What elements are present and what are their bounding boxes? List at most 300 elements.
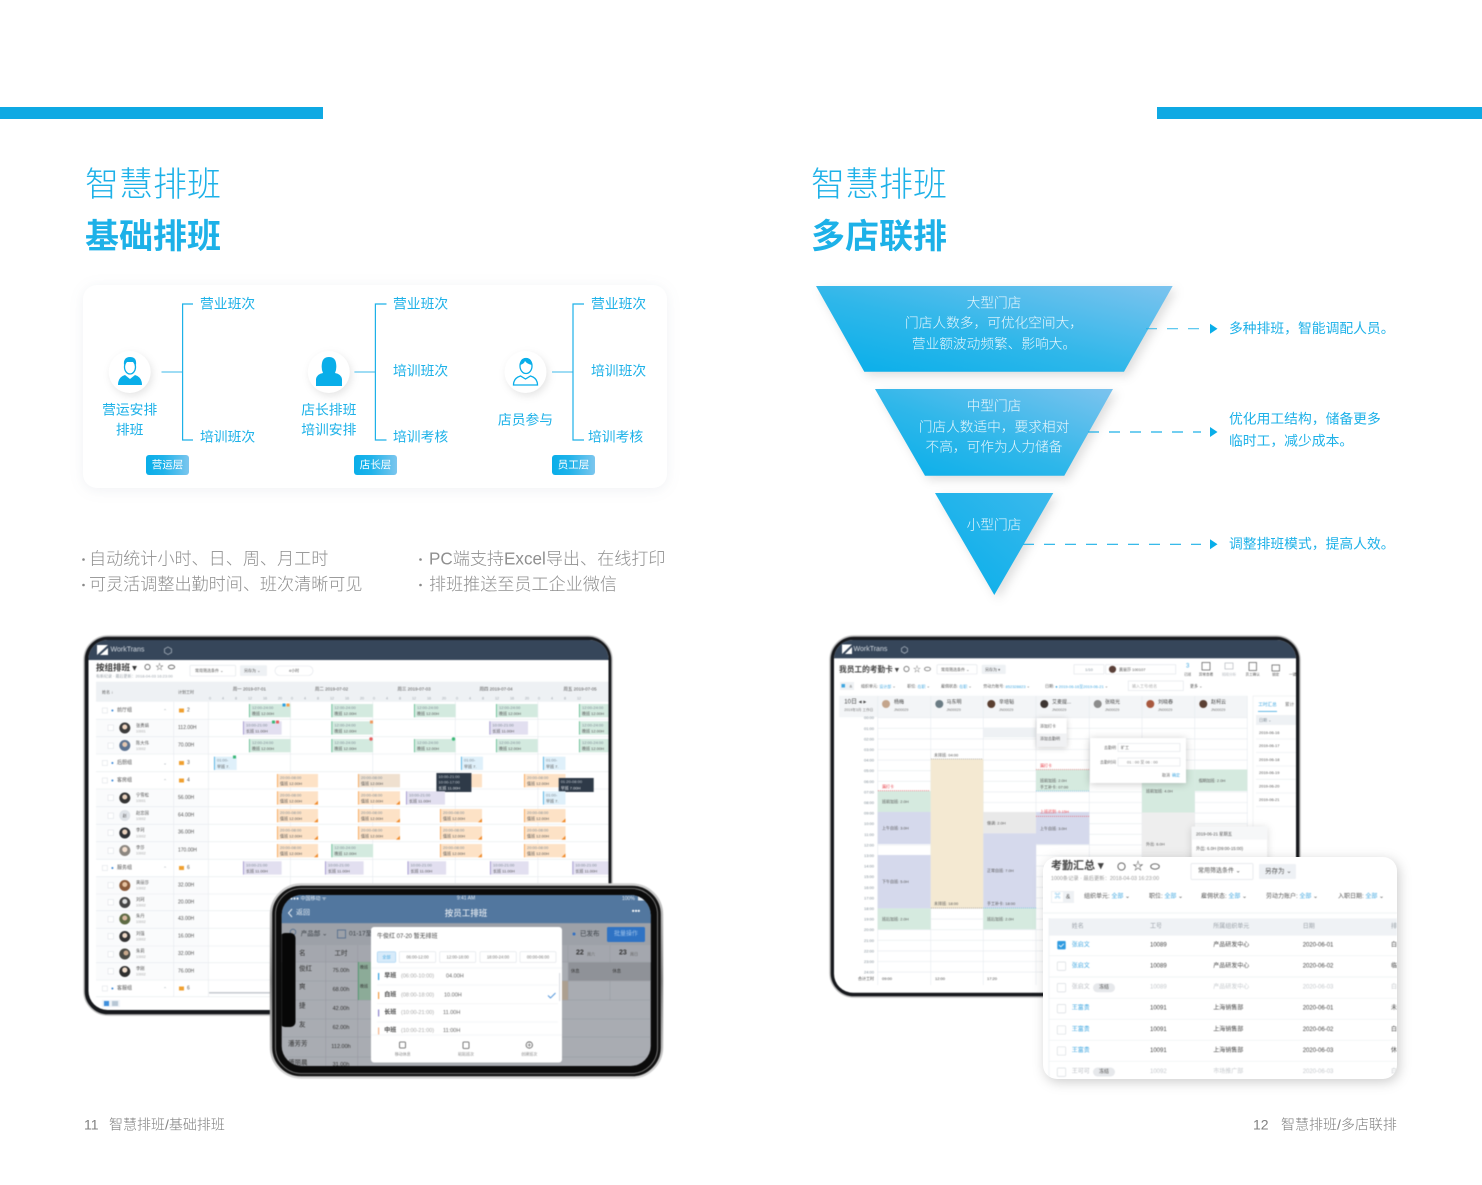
calendar column 3 blocks: 借调: 2.0H xyxy=(987,820,1006,826)
calendar column 4 blocks xyxy=(1036,762,1089,844)
shifts row 3: 12:00-24:00 xyxy=(334,740,357,745)
shifts row 7: 值班 12.00H xyxy=(527,815,549,821)
schedule toolbar: 有新纪录 · 最后更新：2018-04-03 16:23:00 xyxy=(96,672,173,678)
shifts row 6: 值班 12.00H xyxy=(361,797,383,803)
phone filter bar: 01-17至 xyxy=(349,930,373,938)
attendance filters: & xyxy=(850,684,852,688)
right heading xyxy=(811,166,947,256)
calendar grid and hour axis: 17:20 xyxy=(987,976,998,981)
phone header: 返回 xyxy=(296,908,310,916)
calendar header: JN00029 xyxy=(999,708,1013,712)
context menu xyxy=(1037,718,1067,747)
name column: 10002 xyxy=(136,886,146,890)
table rows: 10092 xyxy=(1150,1069,1167,1075)
shifts row 5: 20:00-08:00 xyxy=(361,775,383,780)
table rows: 冻结 xyxy=(1099,1068,1109,1075)
hours side panel: 累计 xyxy=(1285,701,1295,708)
phone header: ●●●● 中国移动 ᯤ xyxy=(287,895,327,902)
shifts row 2: 10:00-21:00 xyxy=(246,722,268,727)
shifts row 1: 12:00-24:00 xyxy=(252,705,274,710)
card filters: & xyxy=(1066,894,1071,900)
shifts row 7: 值班 12.00H xyxy=(361,815,383,821)
calendar grid and hour axis: 00:00 xyxy=(864,715,875,720)
left page footer: 11 xyxy=(84,1116,99,1132)
table rows: 白 xyxy=(1391,1025,1397,1033)
role: operations: 营业班次 xyxy=(200,296,255,312)
calendar header xyxy=(839,696,1247,717)
name column: ⌃ xyxy=(163,866,167,870)
calendar header: 10日 ◂ ▸ xyxy=(844,698,866,705)
name column: 10002 xyxy=(136,955,146,959)
phone header: 按员工排班 xyxy=(445,908,488,918)
calendar column 1 blocks: 漏打卡 xyxy=(882,783,894,789)
calendar header: JN00029 xyxy=(894,708,908,712)
shifts row 3: 晚班 12.00H xyxy=(582,745,604,751)
shifts row 9: 20:00-08:00 xyxy=(443,845,465,850)
calendar grid and hour axis: 11:00 xyxy=(864,832,875,837)
shifts row 5: 10:00-21:00 xyxy=(438,774,461,779)
hours side panel: 日期 ⌄ xyxy=(1259,716,1271,722)
calendar column 3 blocks: 班后加班: 2.0H xyxy=(987,916,1014,922)
calendar header: JN00029 xyxy=(1105,708,1119,712)
schedule toolbar: 4小时 xyxy=(289,667,299,673)
shift picker modal: 11.00H xyxy=(443,1010,460,1016)
name column: 10002 xyxy=(136,852,146,856)
shifts row 8: 20:00-08:00 xyxy=(280,827,302,832)
name column: 20.00H xyxy=(178,900,195,906)
table header: 0 4 8 12 16 20 xyxy=(209,696,282,700)
table rows: 2020-06-01 xyxy=(1303,942,1334,948)
calendar grid and hour axis: 08:00 xyxy=(864,800,875,805)
shifts row 9: 值班 12.00H xyxy=(527,850,549,856)
phone table: 晚班 xyxy=(360,964,368,970)
calendar column 2 blocks: 未排班: 04:00 xyxy=(934,752,959,758)
top right accent bar xyxy=(1157,107,1482,119)
calendar grid and hour axis: 22:00 xyxy=(864,948,875,953)
table rows: 张启文 xyxy=(1072,983,1090,991)
name column: ⌄ xyxy=(163,760,167,766)
table header: 周二 2019-07-02 xyxy=(315,686,349,692)
calendar header: 刘晓春 xyxy=(1158,698,1173,705)
name column: 张勇娟 xyxy=(136,722,149,729)
calendar grid and hour axis: 14:00 xyxy=(864,864,875,869)
name column: 10001 xyxy=(136,799,146,803)
table rows xyxy=(1049,918,1397,1079)
attendance filters: 劳动力账号: 852328823 ⌄ xyxy=(983,682,1030,688)
phone table: 112.00h xyxy=(331,1044,351,1050)
context menu: 添加打卡 xyxy=(1040,722,1056,728)
phone table: 31.00h xyxy=(333,1062,349,1068)
table rows: 市场推广部 xyxy=(1213,1067,1243,1075)
calendar column 2 blocks xyxy=(931,752,983,908)
name column: 16.00H xyxy=(178,934,195,940)
table rows: 临 xyxy=(1391,961,1397,969)
name column: 黄丽莎 xyxy=(136,879,150,886)
shifts row 8: 值班 12.00H xyxy=(443,832,465,838)
shifts row 4: 01:00- xyxy=(217,758,229,763)
right page footer: 12 xyxy=(1253,1116,1269,1132)
role: staff: 员工层 xyxy=(558,459,589,471)
role: store manager: 培训考核 xyxy=(393,430,448,444)
table header: 0 4 8 12 16 20 xyxy=(373,696,446,700)
table header: 日期 xyxy=(1303,922,1315,930)
table header: 周四 2019-07-04 xyxy=(479,686,513,692)
shift picker modal: (10:00-21:00) xyxy=(401,1010,434,1016)
shifts row 9: 值班 12.00H xyxy=(443,850,465,856)
phone camera notch xyxy=(280,933,296,1027)
shifts row 7: 值班 12.00H xyxy=(443,815,465,821)
phone header: 9:41 AM xyxy=(457,896,475,902)
shifts row 4: 01:00- xyxy=(546,758,558,763)
shifts row 1: 12:00-24:00 xyxy=(334,705,357,710)
attendance toolbar: 另存为 ▾ xyxy=(985,666,1000,672)
table rows: 产品研发中心 xyxy=(1213,983,1249,991)
shift picker modal: 创建班次 xyxy=(521,1050,537,1056)
table rows: 10089 xyxy=(1150,942,1167,948)
app top bar: WorkTrans xyxy=(110,646,145,654)
card filters: 雇佣状态: 全部 ⌄ xyxy=(1201,892,1247,900)
shifts row 10: 10:00-21:00 xyxy=(246,862,268,867)
shifts row 3: 12:00-24:00 xyxy=(417,740,439,745)
schedule toolbar: ☆ xyxy=(156,662,164,672)
name column: 刘强 xyxy=(136,930,145,937)
role: operations xyxy=(102,296,255,475)
shifts row 9: 值班 12.00H xyxy=(280,850,302,856)
schedule toolbar: 按组排班 ▾ xyxy=(96,662,137,672)
name column: 刘珂 xyxy=(136,896,145,903)
app top bar: WorkTrans xyxy=(854,646,888,653)
attendance toolbar xyxy=(839,662,1297,676)
role: staff xyxy=(498,296,646,475)
shifts row 3: 晚班 12.00H xyxy=(334,745,357,751)
calendar header: JN00029 xyxy=(1158,708,1172,712)
calendar column 2 blocks: 未排班: 18:00 xyxy=(934,900,959,906)
table rows: 白 xyxy=(1391,1067,1397,1075)
shift picker modal: 白班 xyxy=(384,990,396,998)
shift picker modal xyxy=(371,927,562,1062)
role: operations: 培训班次 xyxy=(200,430,255,444)
hours side panel: 2019-06-16 xyxy=(1259,730,1280,735)
shift picker modal: 06:00-12:00 xyxy=(406,954,429,960)
role: store manager: 店长排班 xyxy=(301,402,357,418)
arrow: large store advice xyxy=(1146,320,1395,336)
name column: 4 xyxy=(187,778,190,784)
calendar grid and hour axis: 13:00 xyxy=(864,853,875,858)
name column: 10002 xyxy=(136,817,146,821)
shifts row 2: 10:00-21:00 xyxy=(492,722,515,727)
attendance dialog xyxy=(1090,738,1186,783)
shifts row 2: 12:00-24:00 xyxy=(582,722,604,727)
shifts row 2: 长班 11.00H xyxy=(492,727,514,733)
phone table: 周日 xyxy=(630,950,638,956)
card heading: 1000条记录 · 最后更新：2018-04-03 16:23:00 xyxy=(1051,874,1159,882)
calendar header: JN00029 xyxy=(1211,708,1225,712)
shift picker modal: (08:00-18:00) xyxy=(401,992,434,998)
shifts row 2: 长班 11.00H xyxy=(246,727,268,733)
attendance dialog: 旷工 xyxy=(1121,744,1129,750)
phone table: 周六 xyxy=(587,950,595,956)
attendance toolbar: 1/10 xyxy=(1085,667,1094,672)
table header: 工号 xyxy=(1150,923,1162,930)
hours side panel: 2019-06-17 xyxy=(1259,743,1280,748)
name column: 李刚 xyxy=(136,965,145,972)
calendar column 3 blocks: 手工补卡: 18:00 xyxy=(987,900,1016,906)
table rows: 王富贵 xyxy=(1072,1046,1090,1054)
calendar grid and hour axis: 01:00 xyxy=(864,726,875,731)
phone filter bar: 产品部 ⌄ xyxy=(301,928,327,938)
attendance dialog: 去勤时间 xyxy=(1100,758,1116,764)
calendar header: 辛培韬 xyxy=(999,698,1014,705)
name column: 前厅组 xyxy=(117,706,132,714)
calendar column 1 blocks: 班前加班: 2.0H xyxy=(882,798,909,804)
attendance toolbar: 员工确认 xyxy=(1246,671,1260,676)
table header: 周五 2019-07-05 xyxy=(563,686,597,692)
arrow: medium store advice: 优化用工结构，储备更多 xyxy=(1229,410,1381,426)
shifts row 4: 早班 7. xyxy=(217,763,229,769)
left heading: 基础排班 xyxy=(85,218,221,256)
name column: 后厨组 xyxy=(117,759,132,766)
app top bar xyxy=(834,640,1296,658)
shifts row 3: 晚班 12.00H xyxy=(252,745,274,751)
card filters: ⌘ xyxy=(1054,893,1061,900)
calendar columns 6-7 blocks: 外出: 6.0H xyxy=(1146,840,1165,846)
calendar header: JN00029 xyxy=(946,708,961,712)
table header: 周一 2019-07-01 xyxy=(233,686,267,692)
table rows: 上海销售部 xyxy=(1213,1004,1243,1012)
attendance summary table card xyxy=(1043,857,1397,1079)
table header: 周三 2019-07-03 xyxy=(397,686,431,692)
table rows: 10091 xyxy=(1150,1006,1167,1012)
name column: 64.00H xyxy=(178,812,195,818)
name column: 170.00H xyxy=(178,848,197,854)
shift picker modal: 粘贴班次 xyxy=(458,1050,474,1056)
attendance toolbar: 一键 xyxy=(1289,671,1297,676)
feature bullet list: 排班推送至员工企业微信 xyxy=(429,575,617,594)
role: staff: 营业班次 xyxy=(591,296,646,312)
calendar grid and hour axis: 24:00 xyxy=(864,970,875,975)
card filters xyxy=(1051,891,1384,903)
phone table: 22 xyxy=(576,950,584,956)
table rows: 王富贵 xyxy=(1072,1025,1090,1033)
shifts row 5: 值班 12.00H xyxy=(361,780,383,786)
calendar grid and hour axis xyxy=(858,696,1247,985)
shifts row 1: 晚班 12.00H xyxy=(499,710,521,716)
phone table: 42.00h xyxy=(333,1006,349,1012)
calendar header: 赵柯云 xyxy=(1211,698,1226,705)
name column: 宁雪松 xyxy=(136,792,150,798)
phone table: 晚班 xyxy=(360,982,368,988)
name column: 70.00H xyxy=(178,742,195,748)
name column: 10002 xyxy=(136,904,146,908)
attendance filters: 输入工号/姓名 xyxy=(1132,682,1157,688)
shifts row 10: 10:00-21:00 xyxy=(328,862,350,867)
shift picker modal: 全部 xyxy=(382,954,391,960)
attendance toolbar: 锁定 xyxy=(1272,671,1280,676)
phone filter bar xyxy=(281,923,651,945)
calendar column 3 blocks xyxy=(983,728,1036,929)
role: store manager: 培训安排 xyxy=(301,422,357,438)
shifts row 1 xyxy=(249,704,621,717)
shifts row 1: 12:00-24:00 xyxy=(417,705,439,710)
table rows: 白 xyxy=(1391,940,1397,948)
calendar grid and hour axis: 16:00 xyxy=(864,885,875,890)
arrow: small store advice xyxy=(1023,536,1395,552)
shifts row 4 xyxy=(214,756,566,770)
phone filter bar: 批量操作 xyxy=(614,930,638,938)
shifts row 1: 晚班 12.00H xyxy=(334,710,357,716)
shifts row 1: 晚班 12.00H xyxy=(582,710,604,716)
table header: 姓名 xyxy=(1072,922,1084,930)
name column: 10002 xyxy=(136,920,146,924)
name column: 10001 xyxy=(136,730,146,734)
calendar column 1 blocks xyxy=(878,783,931,929)
shifts row 9: 20:00-08:00 xyxy=(280,845,302,850)
schedule toolbar xyxy=(96,662,313,678)
shifts row 1: 晚班 12.00H xyxy=(252,710,274,716)
phone table: 傅丽晨 xyxy=(288,1058,308,1066)
role: operations: 营运层 xyxy=(152,458,183,471)
shifts row 6: 值班 12.00H xyxy=(280,797,302,803)
right heading: 智慧排班 xyxy=(811,166,947,204)
left heading: 智慧排班 xyxy=(85,166,221,204)
shifts row 8: 20:00-08:00 xyxy=(443,827,465,832)
attendance toolbar: 已班 xyxy=(1184,671,1192,676)
table header: 0 4 8 12 16 20 xyxy=(456,696,529,700)
shift picker modal: 18:00-24:00 xyxy=(487,954,510,960)
role: staff: 培训班次 xyxy=(591,364,646,378)
right page footer: 智慧排班/多店联排 xyxy=(1281,1116,1397,1132)
name column xyxy=(102,706,197,1007)
calendar grid and hour axis: 03:00 xyxy=(864,747,875,752)
table rows: 产品研发中心 xyxy=(1213,940,1249,948)
shifts row 10: 长班 11.00H xyxy=(246,867,268,873)
name column: ⌃ xyxy=(163,778,167,783)
shifts row 7: 20:00-08:00 xyxy=(443,810,465,815)
name column: 客服组 xyxy=(117,984,132,992)
calendar column 1 blocks: 上午自班: 3.0H xyxy=(882,824,909,830)
calendar column 1 blocks: 下午自班: 5.0H xyxy=(882,878,909,884)
calendar column 4 blocks: 上午自班: 3.0H xyxy=(1040,825,1067,831)
calendar column 1 blocks: 班后加班: 2.0H xyxy=(882,916,909,922)
role: store manager: 培训班次 xyxy=(393,364,448,378)
calendar header: 2019年3月 工作日 xyxy=(844,707,873,712)
shifts row 3: 晚班 12.00H xyxy=(499,745,521,751)
shifts row 8: 值班 12.00H xyxy=(361,832,383,838)
shift picker modal: 11:00H xyxy=(443,1028,460,1034)
schedule toolbar: 另存为 ⌄ xyxy=(244,667,260,673)
shifts row 10: 10:00-21:00 xyxy=(493,862,515,867)
table rows: 产品研发中心 xyxy=(1213,961,1249,969)
arrow: medium store advice xyxy=(1088,410,1381,448)
role: store manager xyxy=(301,296,448,475)
calendar header: 马东明 xyxy=(946,698,962,705)
funnel tier: large store: 门店人数多，可优化空间大， xyxy=(905,316,1083,330)
shifts row 10: 长班 11.00H xyxy=(410,867,432,873)
shift picker modal: (10:00-21:00) xyxy=(401,1028,434,1034)
shifts row 8: 值班 12.00H xyxy=(527,832,549,838)
top left accent bar xyxy=(0,107,323,119)
calendar grid and hour axis: 12:00 xyxy=(864,842,875,847)
shifts row 9: 晚班 12.00H xyxy=(334,850,357,856)
phone: per-employee schedule screen xyxy=(271,884,662,1078)
shifts row 6 xyxy=(277,791,566,805)
phone table: 75.00h xyxy=(333,968,349,974)
shifts row 10: 长班 11.00H xyxy=(575,867,597,873)
funnel tier: large store: 营业额波动频繁、影响大。 xyxy=(912,336,1076,352)
attendance toolbar: 异常查看 xyxy=(1199,671,1214,676)
name column: 朱丹 xyxy=(136,912,145,920)
phone filter bar: 已发布 xyxy=(580,928,600,938)
name column: 服务组 xyxy=(117,864,132,871)
table rows: 10091 xyxy=(1150,1027,1167,1033)
name column: 6 xyxy=(187,865,190,871)
name column: 2 xyxy=(187,708,190,714)
table header: 姓名 ↓ xyxy=(102,688,113,694)
shifts row 3: 12:00-24:00 xyxy=(582,740,604,745)
table rows: 2020-06-03 xyxy=(1303,1048,1334,1054)
hours side panel: 2019-06-21 xyxy=(1259,797,1280,802)
right heading: 多店联排 xyxy=(811,218,947,256)
role: staff: 店员参与 xyxy=(498,412,553,428)
shifts row 7 xyxy=(277,809,566,822)
calendar grid and hour axis: 09:00 xyxy=(864,811,875,816)
hours side panel: 2019-06-20 xyxy=(1259,784,1280,788)
shifts row 5: 20:00-08:00 xyxy=(527,775,549,780)
table header: 排 xyxy=(1391,922,1397,930)
shifts row 7: 20:00-08:00 xyxy=(361,810,383,815)
arrow: medium store advice: 临时工，减少成本。 xyxy=(1229,434,1353,448)
calendar column 4 blocks: 漏打卡 xyxy=(1040,762,1052,768)
attendance filters: 职位: 在职 ⌄ xyxy=(907,682,930,688)
shift picker modal: 00:00-06:00 xyxy=(527,954,550,960)
shift picker modal: 04.00H xyxy=(446,974,464,980)
card heading xyxy=(1051,858,1296,882)
card heading: 常用筛选条件 ⌄ xyxy=(1198,866,1241,874)
name column: 32.00H xyxy=(178,951,195,957)
table header: 计划工时 xyxy=(178,688,194,694)
hours side panel: 工时汇总 xyxy=(1258,701,1277,708)
attendance toolbar: 常用筛选条件 ⌄ xyxy=(941,666,969,672)
shifts row 4: 早班 7. xyxy=(464,763,476,769)
attendance filters: 日期: ● 2019-06-16至2019-06-21 ⌄ xyxy=(1045,682,1108,688)
shifts row 1: 12:00-24:00 xyxy=(499,705,521,710)
name column: ⌃ xyxy=(163,986,167,991)
card filters: 组织单元: 全部 ⌄ xyxy=(1084,892,1130,900)
left heading xyxy=(85,166,221,256)
shifts row 10: 长班 11.00H xyxy=(328,867,350,873)
table rows: 王富贵 xyxy=(1072,1004,1090,1012)
shifts row 4: 早班 7. xyxy=(546,763,558,769)
shifts row 5: 值班 12.00H xyxy=(280,780,302,786)
name column: 李莎 xyxy=(136,844,145,851)
phone table: 23 xyxy=(619,950,627,956)
calendar grid and hour axis: 10:00 xyxy=(864,821,875,826)
calendar grid and hour axis: 20:00 xyxy=(864,927,875,932)
name column: 36.00H xyxy=(178,830,195,836)
table rows: 2020-06-01 xyxy=(1303,1006,1334,1012)
card filters: 入职日期: 全部 ⌄ xyxy=(1338,892,1384,900)
table rows: 10089 xyxy=(1150,985,1167,991)
feature bullet list: 自动统计小时、日、周、月工时 xyxy=(89,550,328,568)
name column: 10002 xyxy=(136,747,146,751)
role: operations: 营运安排 xyxy=(102,402,157,418)
attendance filters xyxy=(840,681,1202,690)
shifts row 7: 20:00-08:00 xyxy=(527,810,549,815)
funnel tier: large store: 大型门店 xyxy=(967,296,1021,310)
card heading: ☆ xyxy=(1132,860,1144,872)
shifts row 9: 12:00-24:00 xyxy=(334,845,357,850)
table rows: 10089 xyxy=(1150,963,1167,969)
